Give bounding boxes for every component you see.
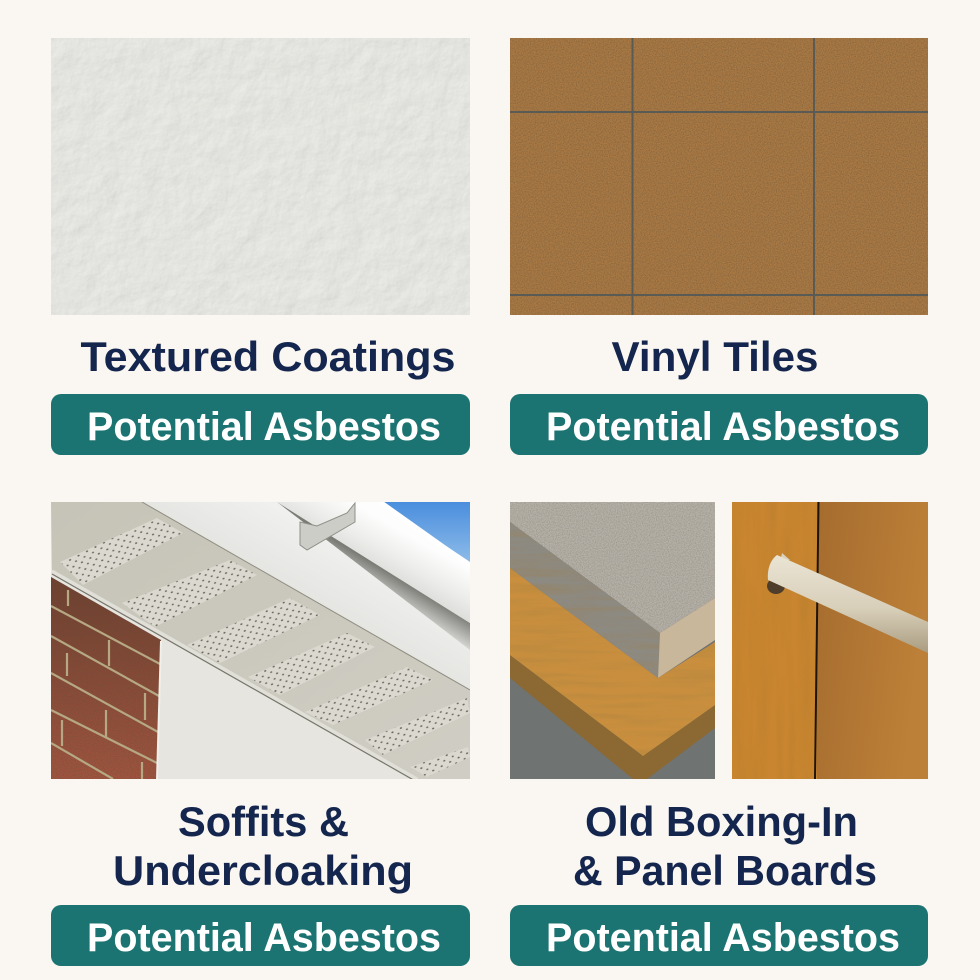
badge: potential asbestos: [51, 905, 470, 966]
badge: potential asbestos: Potential Asbestos: [546, 405, 900, 449]
badge: potential asbestos: Potential Asbestos: [546, 916, 900, 960]
badge: potential asbestos: Potential Asbestos: [87, 916, 441, 960]
photo: textured coating surface: [51, 38, 470, 315]
heading: vinyl tiles: Vinyl Tiles: [612, 333, 818, 380]
badge: potential asbestos: [51, 394, 470, 455]
heading: soffits and undercloaking: [113, 798, 413, 894]
heading: textured coatings: Textured Coatings: [80, 333, 456, 380]
photo: stacked cement and wood boards: [510, 502, 715, 779]
heading: soffits and undercloaking: Soffits &: [178, 798, 349, 845]
badge: potential asbestos: Potential Asbestos: [87, 405, 441, 449]
heading: old boxing-in and panel boards: [573, 798, 877, 894]
panel: textured coatings: [51, 38, 470, 455]
panel: soffits and undercloaking: [51, 502, 470, 966]
heading: old boxing-in and panel boards: Old Boxing-In: [585, 798, 858, 845]
panel: old boxing-in and panel boards: [510, 502, 928, 966]
badge: potential asbestos: [510, 394, 928, 455]
panel: vinyl tiles: [510, 38, 928, 455]
photo: brown vinyl tiles: [510, 38, 928, 315]
heading: old boxing-in and panel boards: & Panel Boards: [573, 847, 877, 894]
badge: potential asbestos: [510, 905, 928, 966]
heading: soffits and undercloaking: Undercloaking: [113, 847, 413, 894]
photo: soffit under a roof edge: [51, 502, 470, 782]
photo: pipe through wooden boxing-in: [732, 502, 928, 779]
